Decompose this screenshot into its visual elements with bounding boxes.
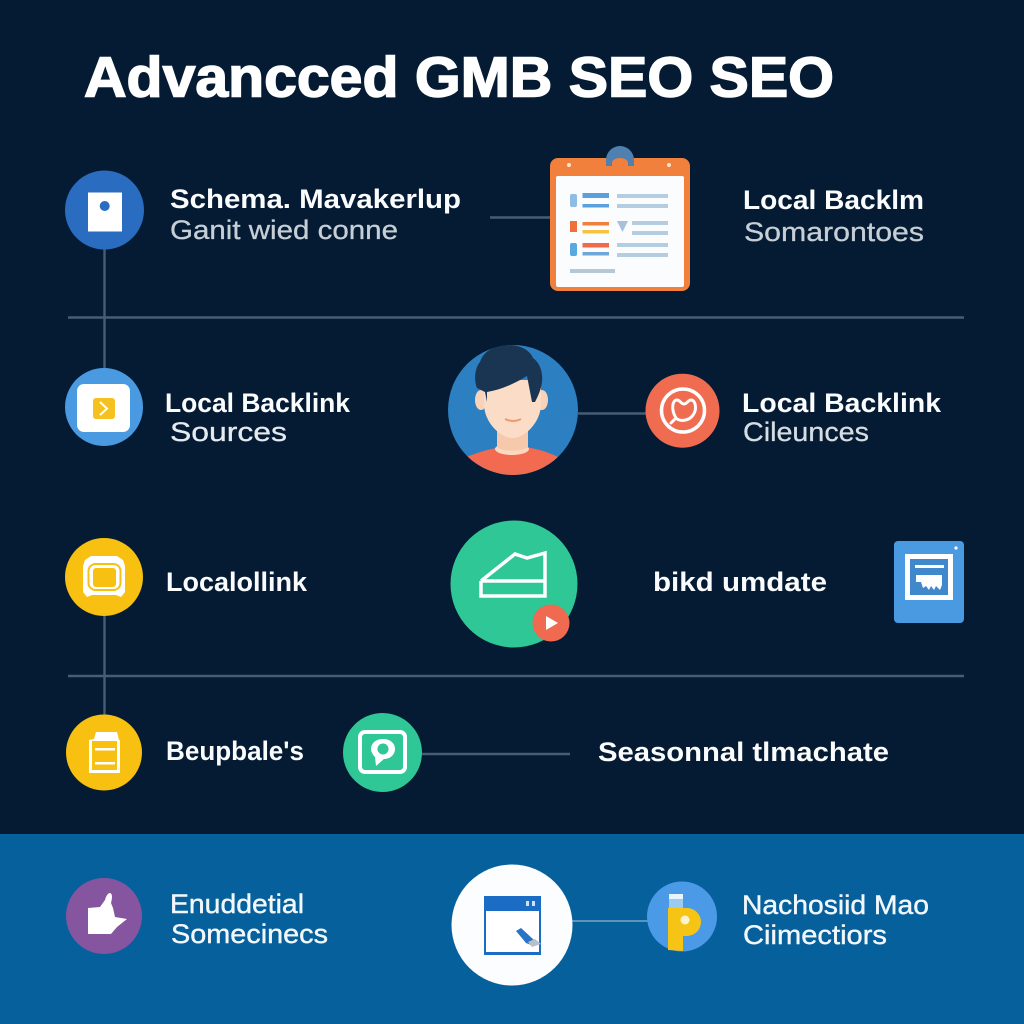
text: bikd update: bikd umdate [653,567,827,597]
text: nachosiid mao: Nachosiid Mao [742,890,929,920]
text: local backlink sources: Local Backlink [165,388,350,418]
icon: purple thumb [66,878,142,954]
text: beupbales: Beupbale's [166,736,304,766]
text: enuddetial somecinecs: Enuddetial [170,889,304,919]
icon: blue window card [894,541,964,623]
icon: schema document [65,170,144,250]
text: local backlink cileunces [742,388,941,447]
text: local backlink cileunces: Cileunces [743,417,869,447]
text: schema markup: Schema. Mavakerlup [170,184,461,214]
icon: person avatar [448,345,578,480]
text: local backlinks top right: Somarontoes [744,217,924,247]
text: local backlinks top right [743,185,924,247]
text: local backlink cileunces: Local Backlink [742,388,941,418]
text: local backlink sources: Sources [170,417,287,447]
text: enuddetial somecinecs: Somecinecs [171,919,328,949]
text: localollink: Localollink [166,567,307,597]
icon: yellow document [66,714,142,790]
title: Advancced GMB SEO SEO [84,46,834,110]
text: nachosiid mao: Ciimectiors [743,920,887,950]
icon: white circle browser [452,864,572,986]
text: enuddetial somecinecs [170,889,328,949]
icon: green chart with play badge [450,520,578,648]
text: schema markup [170,184,461,245]
text: nachosiid mao [742,890,929,950]
icon: yellow device [65,538,143,616]
icon: video tile [65,368,143,446]
icon: blue circle bottle [647,882,717,952]
text: seasonal: Seasonnal tlmachate [598,737,889,767]
text: local backlink sources [165,388,350,447]
icon: chat ring [646,374,720,448]
icon: green speech frame [343,713,422,792]
text: local backlinks top right: Local Backlm [743,185,924,215]
text: schema markup: Ganit wied conne [170,215,398,245]
icon: calendar checklist [550,146,690,291]
